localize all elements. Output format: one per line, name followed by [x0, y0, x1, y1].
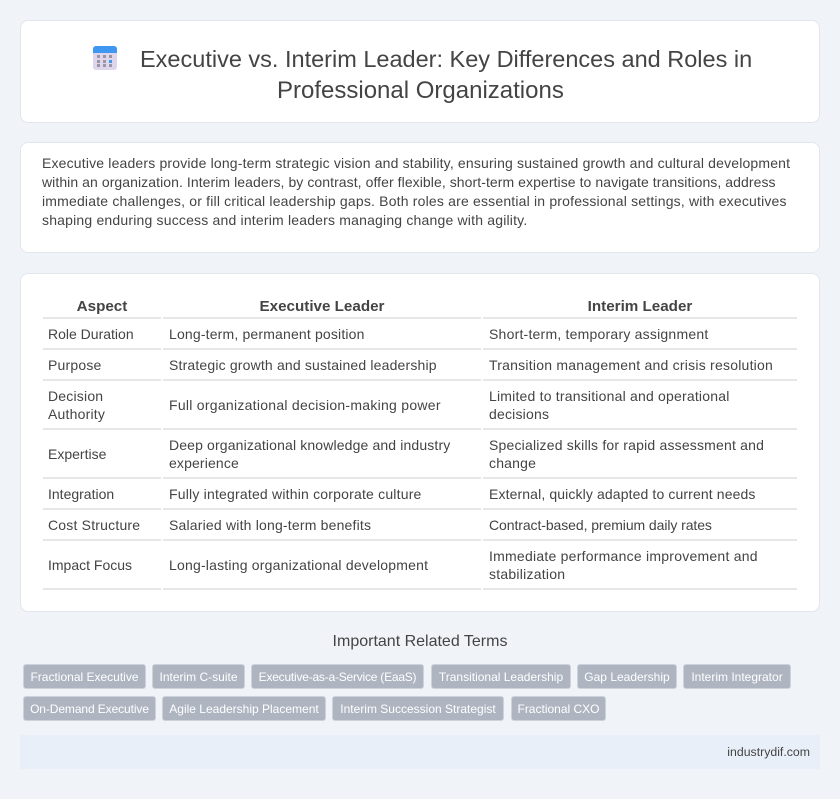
comparison table: Deep organizational knowledge and industry	[169, 437, 450, 453]
comparison table: Long-lasting organizational development	[169, 557, 428, 573]
comparison table: stabilization	[489, 566, 565, 582]
comparison table: Cost Structure	[48, 517, 140, 533]
comparison table: Decision	[48, 388, 103, 404]
related term tags: Interim Succession Strategist	[340, 702, 496, 716]
text: introduction paragraph: within an organization. Interim leaders, by contrast, offer flexible, short-term expertise to navigate transitions, address	[42, 174, 776, 190]
related term tags: Agile Leadership Placement	[169, 702, 319, 716]
related term tags: Fractional CXO	[517, 702, 600, 716]
comparison table: Long-term, permanent position	[169, 326, 365, 342]
comparison table: change	[489, 455, 536, 471]
comparison table: Strategic growth and sustained leadership	[169, 357, 437, 373]
title	[140, 46, 752, 104]
comparison table: Specialized skills for rapid assessment and	[489, 437, 764, 453]
comparison table: Fully integrated within corporate culture	[169, 486, 422, 502]
related term tags	[23, 664, 791, 721]
comparison table: Full organizational decision-making power	[169, 397, 441, 413]
comparison table: Limited to transitional and operational	[489, 388, 730, 404]
text: introduction paragraph	[42, 155, 790, 228]
comparison table: Purpose	[48, 357, 102, 373]
footer text: industrydif.com	[727, 745, 810, 759]
comparison table: Expertise	[48, 446, 106, 462]
comparison table: External, quickly adapted to current needs	[489, 486, 756, 502]
comparison table: Role Duration	[48, 326, 134, 342]
heading: important related terms: Important Related Terms	[333, 633, 507, 650]
comparison table: Executive Leader	[260, 298, 384, 315]
comparison table	[43, 298, 797, 590]
panel: introduction	[20, 142, 820, 253]
related term tags: Gap Leadership	[584, 670, 670, 684]
comparison table: Contract-based, premium daily rates	[489, 517, 712, 533]
comparison table: Authority	[48, 406, 105, 422]
text: introduction paragraph: Executive leaders provide long-term strategic vision and stability, ensuring sustained growth and cultural development	[42, 155, 790, 171]
panel: header	[20, 20, 820, 123]
related term tags: Transitional Leadership	[439, 670, 563, 684]
related term tags: Interim Integrator	[691, 670, 783, 684]
title: Professional Organizations	[277, 77, 564, 104]
comparison table: Salaried with long-term benefits	[169, 517, 371, 533]
comparison table: decisions	[489, 406, 549, 422]
comparison table: Interim Leader	[588, 298, 692, 315]
icon: calendar	[93, 46, 117, 70]
comparison table: Immediate performance improvement and	[489, 548, 758, 564]
related term tags: Interim C-suite	[159, 670, 238, 684]
related term tags: On-Demand Executive	[30, 702, 149, 716]
comparison table: experience	[169, 455, 239, 471]
text: introduction paragraph: immediate challenges, or fill critical leadership gaps. Both roles are essential in professional settings, with executives	[42, 193, 787, 209]
comparison table: Impact Focus	[48, 557, 132, 573]
comparison table: Transition management and crisis resolution	[489, 357, 773, 373]
footer bar	[20, 735, 820, 769]
title: Executive vs. Interim Leader: Key Differences and Roles in	[140, 46, 752, 72]
comparison table: Integration	[48, 486, 114, 502]
text: introduction paragraph: shaping enduring success and interim leaders managing change with agility.	[42, 212, 527, 228]
comparison table: Aspect	[77, 298, 127, 315]
related term tags: Executive-as-a-Service (EaaS)	[259, 670, 416, 684]
comparison table: Short-term, temporary assignment	[489, 326, 708, 342]
panel: comparison table	[20, 273, 820, 612]
related term tags: Fractional Executive	[30, 670, 139, 684]
